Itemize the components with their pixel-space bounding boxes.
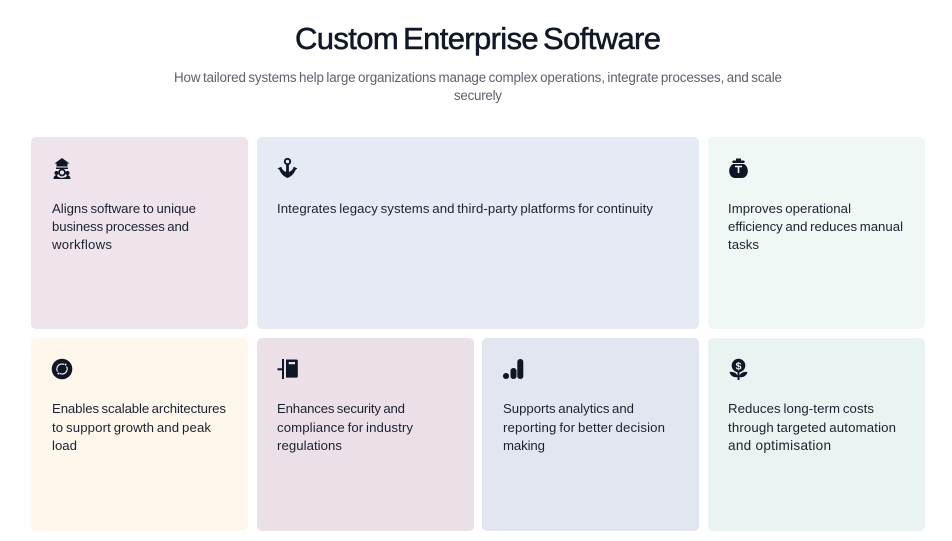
text: and optimisation (728, 438, 831, 453)
text (277, 401, 413, 453)
text: tasks (728, 237, 759, 252)
panel: reduces costs (708, 338, 925, 531)
text (728, 201, 903, 252)
text (51, 201, 196, 252)
text: Improves operational (728, 201, 851, 216)
icon: circular arrows (52, 359, 72, 379)
text: reporting for better decision (503, 420, 665, 435)
text (728, 401, 896, 453)
icon: anchor (278, 159, 298, 178)
text (503, 401, 665, 453)
icon: leader with team (54, 158, 70, 179)
icon: money plant (730, 359, 748, 380)
subtitle: securely (454, 88, 502, 103)
panel: analytics (482, 338, 699, 531)
text: efficiency and reduces manual (728, 219, 903, 234)
subtitle (174, 70, 782, 103)
icon: jar (729, 158, 748, 178)
panel: integrates systems (257, 137, 699, 329)
text: Enables scalable architectures (52, 401, 226, 416)
panel: security and compliance (257, 338, 474, 531)
text: Reduces long-term costs (728, 401, 874, 416)
text: regulations (277, 438, 342, 453)
icon: bar signal (503, 359, 523, 379)
icon: rulebook (278, 359, 298, 379)
title: Custom Enterprise Software (295, 21, 661, 56)
panel: aligns software (31, 137, 248, 329)
text: to support growth and peak (52, 420, 211, 435)
panel: improves efficiency (708, 137, 925, 329)
text: business processes and (52, 219, 189, 234)
text: load (52, 438, 77, 453)
text: Supports analytics and (503, 401, 634, 416)
text: through targeted automation (728, 420, 896, 435)
text: Aligns software to unique (52, 201, 196, 216)
icon: money plant: $ (736, 360, 742, 372)
text: compliance for industry (277, 420, 413, 435)
text (52, 401, 226, 453)
panel: scalable architectures (31, 338, 248, 531)
text: Enhances security and (277, 401, 405, 416)
text: Integrates legacy systems and third-party platforms for continuity (277, 201, 653, 216)
text: making (503, 438, 545, 453)
subtitle: How tailored systems help large organizations manage complex operations, integrate processes, and scale (174, 70, 782, 85)
text: workflows (51, 237, 112, 252)
